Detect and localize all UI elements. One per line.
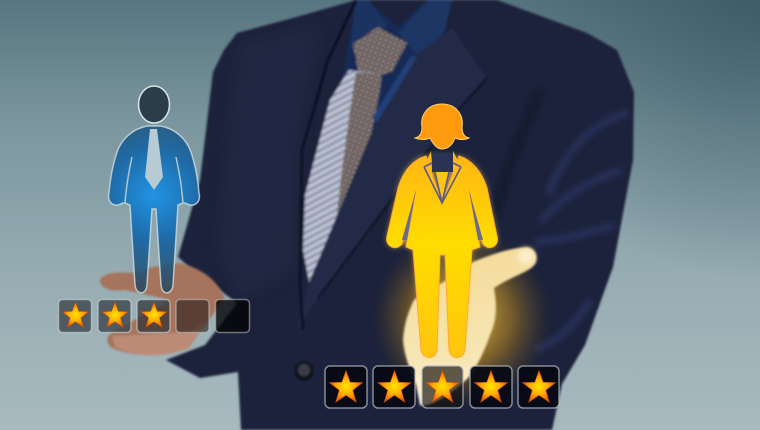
star 5	[522, 370, 556, 402]
businessman in suit	[166, 0, 634, 430]
rating box 1	[58, 300, 92, 332]
arm slits	[125, 157, 183, 203]
right hand	[403, 247, 537, 405]
right collar	[398, 0, 452, 62]
necktie	[145, 129, 163, 190]
left collar	[350, 0, 388, 50]
star 3	[426, 370, 459, 402]
sleeve highlights	[535, 112, 628, 350]
star 2	[378, 370, 411, 402]
left hand	[100, 263, 225, 355]
star 1	[62, 302, 89, 327]
rating box 4	[470, 366, 512, 408]
body	[387, 156, 498, 358]
rating box 3	[137, 300, 170, 332]
rating box 5	[216, 300, 250, 332]
lapel shadow	[318, 78, 487, 298]
rating box 2	[373, 366, 415, 408]
jacket button	[294, 361, 314, 381]
yellow female figure	[387, 104, 498, 358]
head	[138, 86, 170, 123]
necktie	[303, 27, 407, 287]
star 4	[474, 370, 508, 402]
blouse	[435, 172, 449, 203]
five of five star rating	[325, 366, 559, 408]
outer halo	[387, 156, 498, 358]
golden glow	[374, 230, 550, 406]
jacket body	[166, 0, 634, 430]
rating box 5	[518, 366, 559, 408]
left panel shading	[218, 25, 320, 300]
blue male figure	[109, 86, 199, 293]
fingertip highlight	[518, 248, 534, 264]
neck gap	[432, 153, 453, 172]
star 2	[102, 302, 128, 327]
collar right	[453, 151, 461, 172]
star 3	[141, 302, 167, 327]
star 1	[329, 370, 363, 402]
sleeve shadow	[495, 90, 540, 215]
right lapel	[297, 28, 487, 330]
hair and head	[415, 104, 469, 149]
rating box 2	[98, 300, 131, 332]
rating box 3	[422, 366, 463, 408]
lapel outlines	[424, 163, 461, 203]
rating box 1	[325, 366, 367, 408]
arm gaps	[402, 190, 483, 240]
shirt	[338, 0, 452, 170]
neck	[368, 0, 428, 27]
left jacket edge shadow	[300, 0, 356, 330]
three of five star rating	[58, 300, 250, 332]
collar left	[424, 151, 432, 172]
body	[109, 126, 199, 293]
lapel shirt edge	[372, 56, 417, 122]
rating box 4	[176, 300, 209, 332]
